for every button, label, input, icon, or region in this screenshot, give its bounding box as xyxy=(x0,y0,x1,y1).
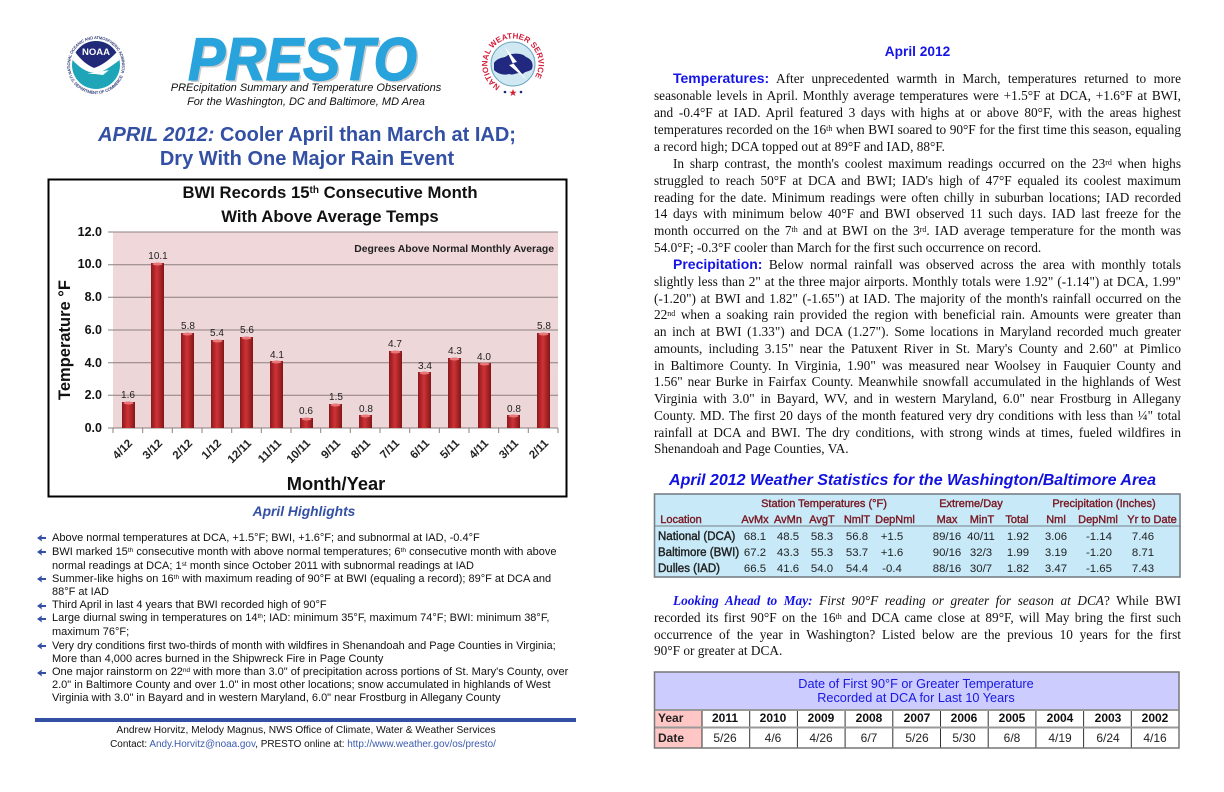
table rows: 56.8 xyxy=(846,531,868,543)
table rows: 3.06 xyxy=(1045,531,1067,543)
date row: 4/16 xyxy=(1143,731,1167,745)
date row: 4/6 xyxy=(765,731,782,745)
table rows: 1.82 xyxy=(1007,563,1029,575)
credits: authors and contact: Contact: Andy.Horvitz@noaa.gov, PRESTO online at: http://www.weather.gov/os/presto/ xyxy=(110,738,496,750)
table header: Location xyxy=(660,514,702,526)
text: County. MD. The first 20 days of the month featured very dry conditions with less than ¼" total xyxy=(654,408,1181,423)
text: amounts, including 3.15" near the Patuxent River in St. Mary's County and 2.60" at Pimlico xyxy=(654,341,1181,356)
x axis labels: 10/11 xyxy=(285,437,314,466)
x axis labels xyxy=(111,437,552,466)
icon: NOAA logo: NATIONAL OCEANIC AND ATMOSPHERIC ADMINISTRATION xyxy=(67,36,125,74)
table rows: 54.4 xyxy=(846,563,868,575)
x axis labels: 4/12 xyxy=(111,438,135,462)
table rows: Baltimore (BWI) xyxy=(658,547,739,559)
year row: 2003 xyxy=(1095,711,1122,725)
table rows: 30/7 xyxy=(970,563,992,575)
table rows: 90/16 xyxy=(933,547,961,559)
table rows: 8.71 xyxy=(1132,547,1154,559)
table: first 90F dates xyxy=(654,671,1180,749)
table rows: 7.46 xyxy=(1132,531,1154,543)
text: 90°F or greater at DCA. xyxy=(654,643,782,658)
table rows: -0.4 xyxy=(882,563,902,575)
table rows: -1.14 xyxy=(1086,531,1112,543)
table header: MinT xyxy=(970,514,994,526)
y axis labels: 4.0 xyxy=(85,356,102,370)
subtitle: program description: For the Washington, DC and Baltimore, MD Area xyxy=(187,96,425,108)
row labels: Date xyxy=(658,731,684,745)
text: Looking Ahead to May: First 90°F reading or greater for season at DCA? While BWI xyxy=(673,593,1181,608)
y axis labels xyxy=(78,225,102,435)
table rows: 88/16 xyxy=(933,563,961,575)
table rows: 40/11 xyxy=(967,531,995,543)
plot area xyxy=(113,232,558,428)
year row: 2010 xyxy=(760,711,787,725)
table header: DepNml xyxy=(875,514,915,526)
y axis title: Temperature °F xyxy=(56,280,74,400)
text: 14 days with minimum below 40°F and BWI observed 11 such days. IAD last freeze for the xyxy=(654,206,1181,221)
y axis labels: 2.0 xyxy=(85,388,102,402)
list: highlight bullets: normal readings at DCA; 1st month since October 2011 with subnormal readings at IAD xyxy=(52,560,474,572)
text: 1.56" near Burke in Fairfax County. Meanwhile snowfall accumulated in the highlands of West xyxy=(654,374,1181,389)
table rows: 1.92 xyxy=(1007,531,1029,543)
table rows: 53.7 xyxy=(846,547,868,559)
list: highlight bullets: One major rainstorm on 22nd with more than 3.0" of precipitation across portions of St. Mary's County, over xyxy=(52,666,568,678)
x axis labels: 7/11 xyxy=(378,437,403,462)
x axis labels: 11/11 xyxy=(256,437,285,466)
bar value labels: 5.8 xyxy=(537,321,551,332)
text: reading for the date. Minimum readings were often chilly in suburban locations; IAD recorded xyxy=(654,190,1181,205)
x axis labels: 6/11 xyxy=(408,437,433,462)
table title: Date of First 90°F or Greater Temperature xyxy=(798,677,1034,691)
table rows: 1.99 xyxy=(1007,547,1029,559)
x axis labels: 8/11 xyxy=(349,437,374,462)
bar value labels: 1.6 xyxy=(121,390,135,401)
text: a record high; DCA topped out at 89°F and IAD, 88°F. xyxy=(654,139,945,154)
table rows: 3.19 xyxy=(1045,547,1067,559)
divider bar xyxy=(35,718,576,722)
table header: Max xyxy=(937,514,958,526)
table rows: 55.3 xyxy=(811,547,833,559)
table header: Nml xyxy=(1046,514,1066,526)
heading: April Highlights: April Highlights xyxy=(253,504,355,519)
icon: NOAA logo xyxy=(67,36,125,94)
text: struggled to reach 50°F at DCA and BWI; IAD's high of 47°F equaled its coolest maximum xyxy=(654,173,1181,188)
bar value labels: 10.1 xyxy=(148,251,168,262)
table rows: National (DCA) xyxy=(658,531,735,543)
panel: BWI bar chart xyxy=(48,178,568,498)
chart note: Degrees Above Normal Monthly Average xyxy=(354,244,554,255)
table header: Total xyxy=(1005,514,1029,526)
table header: Precipitation (Inches) xyxy=(1052,498,1156,510)
table rows: 58.3 xyxy=(811,531,833,543)
bar value labels: 4.1 xyxy=(270,350,284,361)
date row: 4/19 xyxy=(1048,731,1072,745)
table rows: 48.5 xyxy=(777,531,799,543)
text: occurrence of the year in Washington? Listed below are the previous 10 years for the first xyxy=(654,627,1181,642)
text: 22nd when a soaking rain provided the region with beneficial rain. Amounts were greater than xyxy=(654,307,1181,322)
bar value labels: 0.8 xyxy=(507,404,521,415)
list: highlight bullets: Virginia with 3.0" in Bayard and in western Maryland, 6.0" near Frostburg in Allegany County xyxy=(52,692,500,704)
bars xyxy=(122,262,550,428)
bar value labels: 3.4 xyxy=(418,361,432,372)
table rows: 32/3 xyxy=(970,547,992,559)
table: station statistics xyxy=(654,493,1181,578)
list: highlight bullets xyxy=(37,532,568,704)
text: and -0.4°F at IAD. April featured 3 days with highs at or above 80°F, with the areas highest xyxy=(654,105,1181,120)
date row: 5/26 xyxy=(905,731,929,745)
table header: NmlT xyxy=(844,514,870,526)
bar value labels: 4.3 xyxy=(448,346,462,357)
list: highlight bullets: 2.0" in Baltimore County and over 1.0" in most other locations; snow accumulated in highlands of West xyxy=(52,679,551,691)
x axis labels: 2/11 xyxy=(527,437,552,462)
title: April 2012 headline: Dry With One Major Rain Event xyxy=(160,148,454,170)
table rows: +1.5 xyxy=(881,531,903,543)
text: seasonable levels in April. Monthly average temperatures were +1.5°F at DCA, +1.6°F at BWI, xyxy=(654,88,1181,103)
x axis labels: 9/11 xyxy=(319,437,344,462)
x axis labels: 1/12 xyxy=(200,438,224,462)
x axis labels: 3/11 xyxy=(497,437,522,462)
bar value labels: 5.8 xyxy=(181,321,195,332)
table rows: -1.65 xyxy=(1086,563,1112,575)
table header: AvMx xyxy=(741,514,769,526)
text: in Baltimore County. In Virginia, 1.90" was measured near Woolsey in Fauquier County and xyxy=(654,358,1181,373)
year row: 2007 xyxy=(904,711,931,725)
list: highlight bullets: maximum 76°F; xyxy=(52,626,129,638)
title: April 2012 headline xyxy=(98,124,516,170)
bar value labels: 4.7 xyxy=(388,339,402,350)
list: highlight bullets: Very dry conditions first two-thirds of month with wildfires in Shenandoah and Page Counties in Virginia; xyxy=(52,640,556,652)
year row: 2002 xyxy=(1142,711,1169,725)
row labels: Year xyxy=(658,711,684,725)
table rows: Dulles (IAD) xyxy=(658,563,720,575)
table title: Recorded at DCA for Last 10 Years xyxy=(817,691,1015,705)
text block: precipitation xyxy=(654,256,1181,456)
text: (-1.20") at BWI and 1.82" (-1.65") at IAD. The majority of the month's rainfall occurred on the xyxy=(654,291,1181,306)
table rows xyxy=(658,531,1154,575)
date row: 5/26 xyxy=(713,731,737,745)
list: highlight bullets: Summer-like highs on 16th with maximum reading of 90°F at BWI (equaling a record); 89°F at DCA and xyxy=(52,573,551,585)
y axis labels: 12.0 xyxy=(78,225,102,239)
text: month occurred on the 7th and at BWI on the 3rd. IAD average temperature for the month was xyxy=(654,223,1181,238)
table rows: 89/16 xyxy=(933,531,961,543)
year row: 2009 xyxy=(808,711,835,725)
credits: authors and contact: Andrew Horvitz, Melody Magnus, NWS Office of Climate, Water & Weather Services xyxy=(116,725,496,736)
text block: temperatures xyxy=(654,70,1181,255)
bar value labels xyxy=(121,251,551,417)
icon: NOAA logo: U.S. DEPARTMENT OF COMMERCE xyxy=(70,75,123,94)
text: Virginia with 3.0" in Bayard, WV, and in western Maryland, 6.0" near Frostburg in Allegany xyxy=(654,391,1181,406)
year row: 2006 xyxy=(951,711,978,725)
table rows: 68.1 xyxy=(744,531,766,543)
list: highlight bullets: Above normal temperatures at DCA, +1.5°F; BWI, +1.6°F; and subnormal at IAD, -0.4°F xyxy=(52,532,480,544)
y axis labels: 8.0 xyxy=(85,290,102,304)
y axis labels: 0.0 xyxy=(85,421,102,435)
table header: AvMn xyxy=(774,514,802,526)
heading: April 2012: April 2012 xyxy=(885,44,950,59)
text: 54.0°F; -0.3°F cooler than March for the first such occurrence on record. xyxy=(654,240,1041,255)
y axis labels: 6.0 xyxy=(85,323,102,337)
table rows: +1.6 xyxy=(881,547,903,559)
bar value labels: 0.6 xyxy=(299,406,313,417)
table rows: 41.6 xyxy=(777,563,799,575)
bar value labels: 5.4 xyxy=(210,328,224,339)
table rows: 54.0 xyxy=(811,563,833,575)
table header: Station Temperatures (°F) xyxy=(761,498,887,510)
text: an inch at BWI (1.33") and DCA (1.27"). Some locations in Maryland recorded much greater xyxy=(654,324,1181,339)
x axis labels: 2/12 xyxy=(171,438,195,462)
icon: National Weather Service logo: NATIONAL WEATHER SERVICE xyxy=(482,32,544,90)
table rows: 7.43 xyxy=(1132,563,1154,575)
table header: DepNml xyxy=(1078,514,1118,526)
x axis labels: 3/12 xyxy=(141,438,165,462)
y axis labels: 10.0 xyxy=(78,257,102,271)
table header xyxy=(660,498,1177,526)
year row: 2004 xyxy=(1047,711,1074,725)
x axis labels: 4/11 xyxy=(467,437,492,462)
row labels xyxy=(658,711,684,745)
icon: NOAA logo: NOAA xyxy=(82,47,110,58)
text: Shenandoah and Page Counties, VA. xyxy=(654,441,849,456)
x axis title: Month/Year xyxy=(287,473,385,494)
heading: weather statistics: April 2012 Weather Statistics for the Washington/Baltimore Area xyxy=(669,472,1156,489)
bar value labels: 5.6 xyxy=(240,325,254,336)
chart title: th xyxy=(310,185,319,196)
text: temperatures recorded on the 16th when BWI soared to 90°F for the first time this season, equaling xyxy=(654,122,1181,137)
date row xyxy=(713,731,1167,745)
table header: Yr to Date xyxy=(1127,514,1177,526)
subtitle: program description: PREcipitation Summary and Temperature Observations xyxy=(171,82,441,94)
list: highlight bullets: More than 4,000 acres burned in the Shipwreck Fire in Page County xyxy=(52,653,383,665)
table rows: 43.3 xyxy=(777,547,799,559)
date row: 4/26 xyxy=(809,731,833,745)
text: Precipitation: Below normal rainfall was observed across the area with monthly totals xyxy=(673,256,1181,272)
chart title: BWI Records 15 xyxy=(182,183,478,202)
bar value labels: 4.0 xyxy=(477,352,491,363)
table header: AvgT xyxy=(809,514,835,526)
table header: Extreme/Day xyxy=(939,498,1003,510)
table rows: 3.47 xyxy=(1045,563,1067,575)
list: highlight bullets: 88°F at IAD xyxy=(52,586,109,598)
table rows: 66.5 xyxy=(744,563,766,575)
text: Temperatures: After unprecedented warmth in March, temperatures returned to more xyxy=(673,70,1181,86)
list: highlight bullets: BWI marked 15th consecutive month with above normal temperatures; 6th consecutive month with above xyxy=(52,546,556,558)
date row: 6/7 xyxy=(861,731,878,745)
year row: 2005 xyxy=(999,711,1026,725)
year row xyxy=(712,711,1169,725)
text: recorded its first 90°F on the 16th and DCA came close at 89°F, will May bring the first such xyxy=(654,610,1181,625)
text: rainfall at DCA and BWI. The dry conditions, with strong winds at times, fueled wildfires in xyxy=(654,425,1181,440)
year row: 2008 xyxy=(856,711,883,725)
text: In sharp contrast, the month's coolest maximum readings occurred on the 23rd when highs xyxy=(673,156,1181,171)
x axis labels: 5/11 xyxy=(438,437,463,462)
year row: 2011 xyxy=(712,711,738,725)
x axis labels: 12/11 xyxy=(226,437,255,466)
subtitle: program description xyxy=(171,82,441,108)
table rows: -1.20 xyxy=(1086,547,1112,559)
bar value labels: 1.5 xyxy=(329,392,343,403)
credits: authors and contact xyxy=(110,725,496,750)
text: slightly less than 2" at the three major airports. Monthly totals were 1.92" (-1.14") at DCA, 1.99" xyxy=(654,274,1181,289)
date row: 6/24 xyxy=(1096,731,1120,745)
table title xyxy=(798,677,1034,705)
table rows: 67.2 xyxy=(744,547,766,559)
bar value labels: 0.8 xyxy=(359,404,373,415)
list: highlight bullets: Large diurnal swing in temperatures on 14th; IAD: minimum 35°F, maximum 74°F; BWI: minimum 38°F, xyxy=(52,612,549,624)
chart title: Consecutive Month xyxy=(319,183,478,202)
date row: 6/8 xyxy=(1004,731,1021,745)
chart title: With Above Average Temps xyxy=(221,207,439,226)
title: April 2012 headline: APRIL 2012: Cooler April than March at IAD; xyxy=(98,124,516,146)
list: highlight bullets: Third April in last 4 years that BWI recorded high of 90°F xyxy=(52,599,327,611)
date row: 5/30 xyxy=(952,731,976,745)
